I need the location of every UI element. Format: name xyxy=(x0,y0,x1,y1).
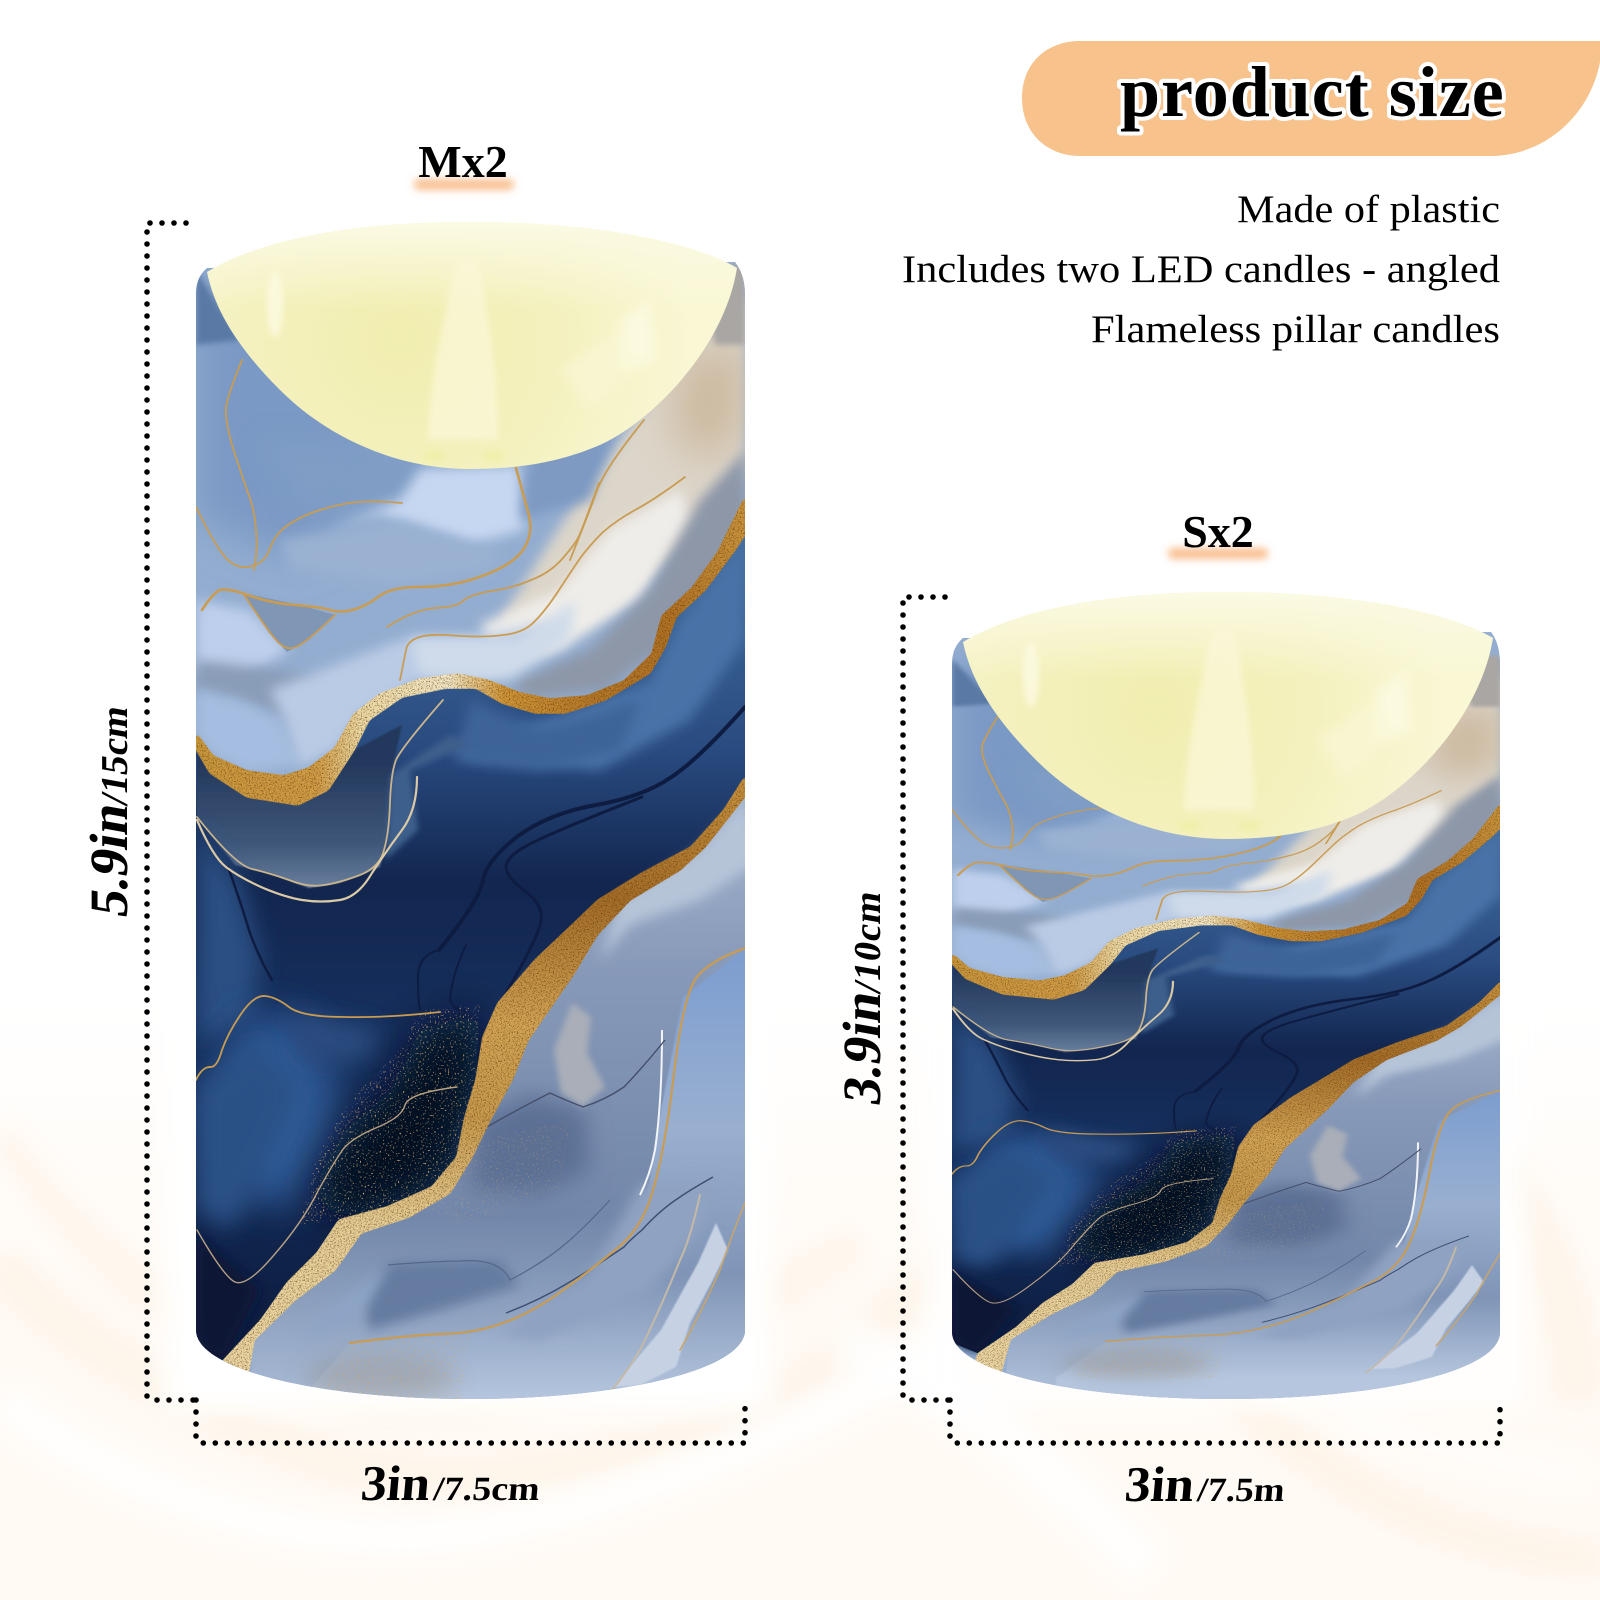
width dimension line for small candle xyxy=(950,1398,1500,1443)
title banner: product size: product size xyxy=(1120,52,1505,132)
label: Mx2 with orange highlight: Mx2 xyxy=(418,136,508,187)
description text block xyxy=(902,188,1501,351)
description text block: Includes two LED candles - angled xyxy=(902,248,1501,291)
label: Sx2 with orange highlight xyxy=(1168,506,1268,559)
label: Sx2 with orange highlight: Sx2 xyxy=(1182,506,1254,557)
height label: 5.9in/15cm: 5.9in/15cm xyxy=(79,700,139,921)
width label: 3in/7.5m: 3in xyxy=(1123,1456,1197,1512)
width label: 3in/7.5m xyxy=(1123,1456,1288,1512)
glowing top and flame of small candle xyxy=(963,592,1493,839)
description text block: Made of plastic xyxy=(1237,188,1500,231)
title banner: product size xyxy=(1022,41,1600,156)
height dimension line for small candle xyxy=(903,597,950,1400)
width label: 3in/7.5cm: 3in xyxy=(359,1455,433,1511)
marble body of small candle xyxy=(952,632,1500,1399)
glowing top and flame of medium candle xyxy=(207,222,737,469)
width label: 3in/7.5m: /7.5m xyxy=(1195,1472,1286,1509)
background: cream waves xyxy=(0,960,1600,1600)
description text block: Flameless pillar candles xyxy=(1091,308,1500,351)
width label: 3in/7.5cm: /7.5cm xyxy=(431,1471,541,1508)
small candle xyxy=(952,592,1500,1399)
width label: 3in/7.5cm xyxy=(359,1455,543,1511)
width dimension line for medium candle xyxy=(196,1398,745,1443)
height label: 3.9in/10cm: 3.9in/10cm xyxy=(832,884,892,1109)
height dimension line for medium candle xyxy=(147,223,196,1400)
marble body of medium candle xyxy=(196,262,745,1399)
medium candle xyxy=(196,222,745,1399)
